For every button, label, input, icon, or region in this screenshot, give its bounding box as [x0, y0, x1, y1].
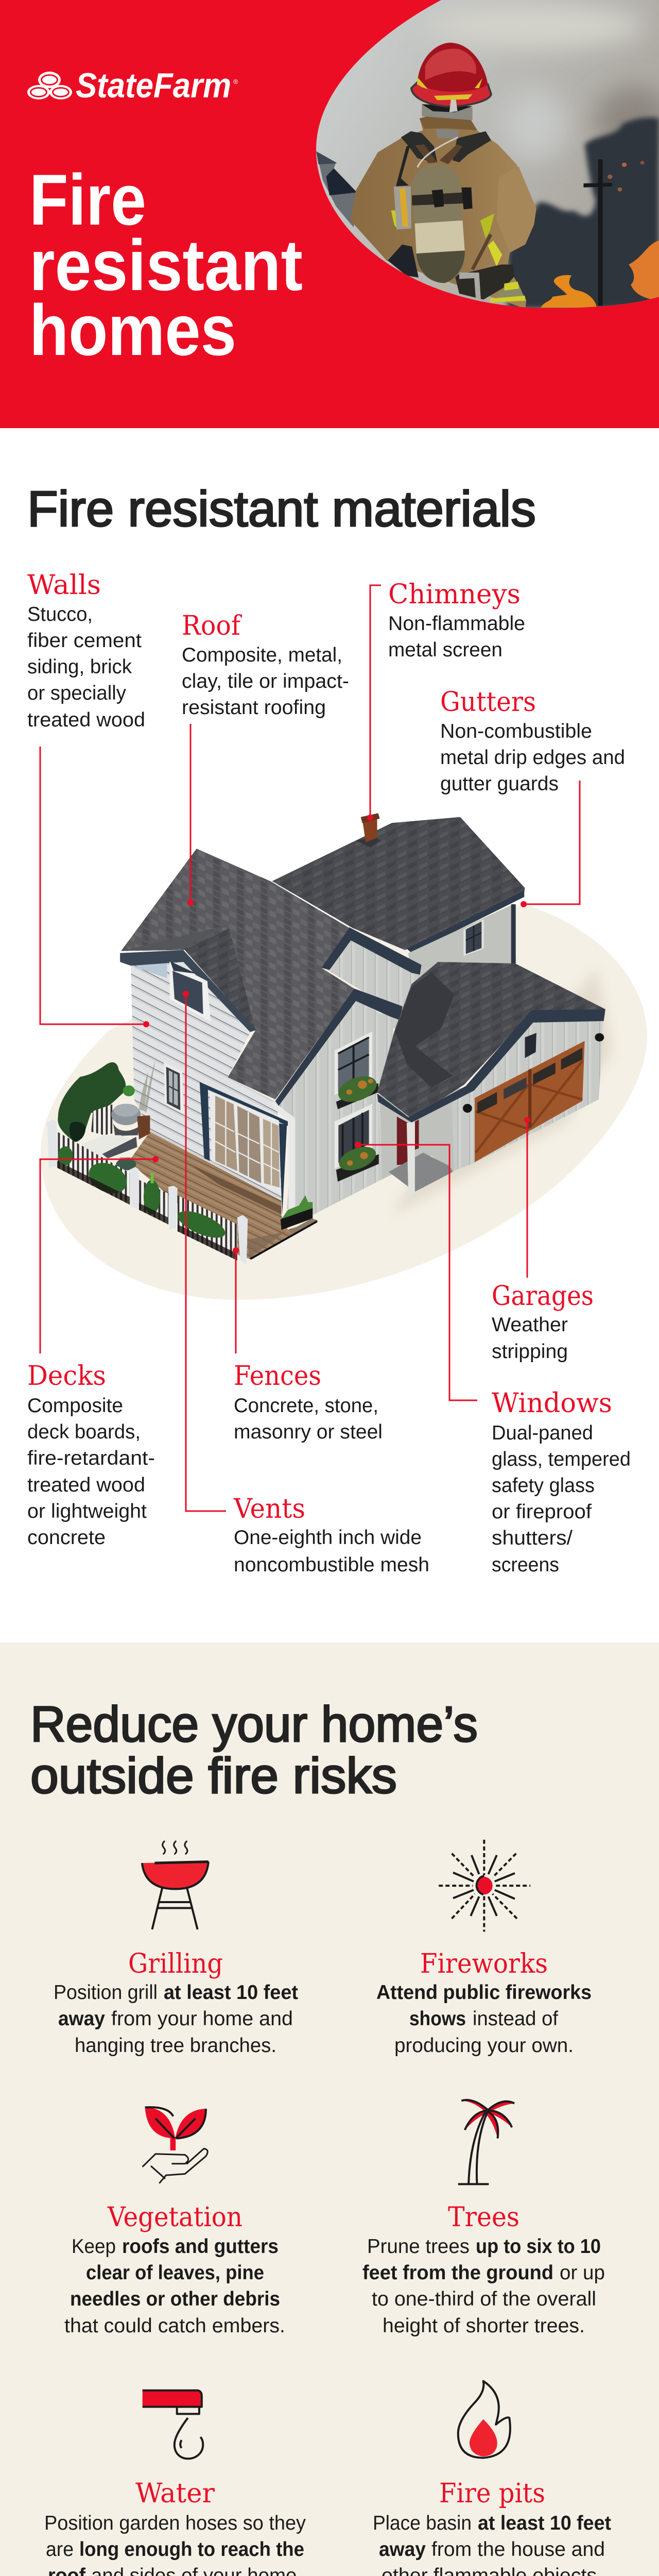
text: fireworks: Fireworks: [420, 1948, 548, 1979]
callout: walls: [27, 570, 145, 731]
text: water: Water: [135, 2478, 215, 2509]
heading: fire resistant materials: Fire resistant materials: [27, 481, 536, 537]
text: vegetation: roofs and gutters: [122, 2235, 279, 2258]
callout: decks: treated wood: [27, 1474, 145, 1496]
gable vent: [169, 961, 211, 1022]
logo: State Farm: ®: [233, 78, 238, 86]
text: fireworks: shows: [409, 2008, 466, 2030]
callout: fences: masonry or steel: [234, 1421, 383, 1443]
logo: State Farm: StateFarm: [76, 66, 231, 105]
callout: gutters: [440, 687, 625, 795]
chimney: [356, 813, 380, 848]
text: fireworks: instead of: [473, 2008, 558, 2030]
callout: roof: [182, 611, 349, 719]
heading: reduce your home's outside fire risks: Reduce your home’s: [30, 1696, 478, 1752]
illustration: house: [47, 813, 613, 1265]
text: trees: or up: [560, 2262, 605, 2284]
left wall with siding: [131, 955, 283, 1201]
text: water: Position garden hoses so they: [44, 2512, 306, 2534]
text: grilling: [54, 1948, 298, 2057]
callout: decks: [27, 1361, 155, 1549]
callout: gutters: gutter guards: [440, 773, 559, 795]
callout: garages: Garages: [492, 1281, 594, 1312]
callout: windows: or fireproof: [492, 1501, 592, 1523]
callout: vents: noncombustible mesh: [234, 1554, 429, 1576]
text: grilling: hanging tree branches.: [75, 2035, 276, 2057]
text: fire pits: at least 10 feet: [478, 2512, 611, 2534]
callout: vents: One-eighth inch wide: [234, 1527, 422, 1549]
callout: roof: Roof: [182, 611, 242, 641]
callout: walls: siding, brick: [27, 656, 132, 678]
callout: gutters: Non-combustible: [440, 720, 592, 742]
panel: fire resistant materials: [27, 481, 647, 1576]
title: Fire: [29, 159, 146, 240]
text: grilling: from your home and: [111, 2008, 293, 2030]
callout: garages: [492, 1281, 594, 1363]
text: fireworks: Attend public fireworks: [376, 1981, 592, 2004]
leader lines: [40, 585, 580, 1511]
callout: decks: deck boards,: [27, 1421, 141, 1443]
fence: [47, 1120, 248, 1265]
callout: windows: shutters/: [492, 1527, 573, 1549]
text: trees: feet from the ground: [362, 2262, 553, 2284]
title: [29, 159, 303, 370]
heading: reduce your home's outside fire risks: [30, 1696, 478, 1804]
callout: vents: Vents: [233, 1494, 305, 1524]
text: fire pits: from the house and: [431, 2538, 605, 2561]
text: vegetation: that could catch embers.: [64, 2315, 285, 2337]
text: trees: Prune trees: [367, 2235, 470, 2258]
corner planter: [281, 1195, 317, 1234]
callout: decks: or lightweight: [27, 1500, 147, 1522]
callout: gutters: metal drip edges and: [440, 747, 625, 769]
callout: windows: screens: [492, 1554, 559, 1576]
text: trees: to one-third of the overall: [372, 2288, 596, 2310]
deck: [119, 1132, 317, 1260]
text: trees: height of shorter trees.: [383, 2315, 585, 2337]
garage roof: [377, 962, 605, 1118]
callout: gutters: Gutters: [440, 687, 536, 718]
callout: windows: [492, 1388, 631, 1576]
callout: walls: Stucco,: [27, 603, 93, 625]
callout: vents: [233, 1494, 429, 1576]
text: grilling: Grilling: [128, 1948, 223, 1979]
heading: reduce your home's outside fire risks: outside fire risks: [30, 1748, 397, 1804]
icon: fireworks: [439, 1840, 530, 1931]
back wall: [408, 904, 516, 985]
callout: decks: Decks: [27, 1361, 106, 1392]
front windows: [335, 1031, 372, 1095]
text: grilling: at least 10 feet: [164, 1981, 298, 2004]
text: trees: up to six to 10: [476, 2235, 601, 2258]
garage wall: [452, 1012, 604, 1171]
icon: palm tree: [458, 2100, 514, 2184]
text: fire pits: Fire pits: [439, 2478, 545, 2509]
callout: walls: fiber cement: [27, 630, 142, 652]
icon: plant in hand: [143, 2107, 207, 2183]
back roof: [272, 817, 525, 950]
side window: [164, 1062, 184, 1114]
callout: walls: Walls: [27, 570, 101, 601]
text: fire pits: [373, 2478, 611, 2576]
callout: roof: resistant roofing: [182, 697, 326, 719]
main front roof: [121, 849, 354, 1099]
text: vegetation: Vegetation: [107, 2202, 242, 2233]
text: fire pits: away: [379, 2538, 426, 2561]
text: fire pits: Place basin: [373, 2512, 472, 2534]
callout: decks: Composite: [27, 1395, 123, 1417]
front gable wall: [277, 999, 393, 1215]
panel: reduce outside fire risks: [0, 1642, 659, 2576]
icon: grill: [142, 1841, 209, 1929]
text: vegetation: needles or other debris: [70, 2288, 280, 2310]
text: water: [44, 2478, 306, 2576]
callout: garages: stripping: [492, 1341, 568, 1363]
callout: garages: Weather: [492, 1314, 568, 1336]
icon: water tap and drop: [143, 2391, 203, 2459]
callout: windows: safety glass: [492, 1475, 595, 1497]
middle gable: [326, 937, 418, 1028]
bush: [58, 1062, 126, 1142]
title: homes: [29, 290, 236, 370]
sliding door: [200, 1082, 288, 1214]
text: water: long enough to reach the: [79, 2538, 304, 2561]
callout: walls: or specially: [27, 682, 127, 704]
callout: walls: treated wood: [27, 709, 145, 731]
callout: fences: Concrete, stone,: [234, 1395, 378, 1417]
callout: windows: Dual-paned: [492, 1422, 593, 1444]
callout: roof: Composite, metal,: [182, 644, 342, 666]
callout: fences: [234, 1361, 383, 1443]
dormer roof: [123, 925, 228, 951]
text: vegetation: clear of leaves, pine: [86, 2262, 264, 2284]
text: fireworks: producing your own.: [394, 2035, 574, 2057]
header panel: [0, 0, 659, 428]
text: trees: Trees: [448, 2202, 519, 2233]
callout: windows: glass, tempered: [492, 1448, 631, 1470]
text: vegetation: Keep: [72, 2235, 116, 2258]
text: grilling: away: [58, 2008, 106, 2030]
callout: roof: clay, tile or impact-: [182, 670, 349, 692]
callout: chimneys: metal screen: [388, 639, 502, 661]
text: trees: [362, 2202, 605, 2337]
ground shape: [41, 905, 647, 1300]
callout: decks: concrete: [27, 1527, 106, 1549]
callout: fences: Fences: [234, 1361, 321, 1392]
callout: decks: fire-retardant-: [27, 1447, 155, 1469]
photo: firefighter facing a burning building: [309, 0, 659, 309]
yard, fence, door and planter: [47, 1060, 317, 1265]
porch wall: [379, 1088, 474, 1179]
text: water: are: [46, 2538, 74, 2561]
callout: windows: Windows: [492, 1388, 612, 1419]
icon: flame: [458, 2381, 510, 2458]
text: vegetation: [64, 2202, 285, 2337]
callout: chimneys: Chimneys: [388, 579, 521, 610]
text: grilling: Position grill: [54, 1981, 158, 2004]
title: resistant: [29, 225, 303, 306]
text: fireworks: [376, 1948, 592, 2057]
callout: chimneys: Non-flammable: [388, 613, 525, 635]
callout: chimneys: [388, 579, 525, 661]
